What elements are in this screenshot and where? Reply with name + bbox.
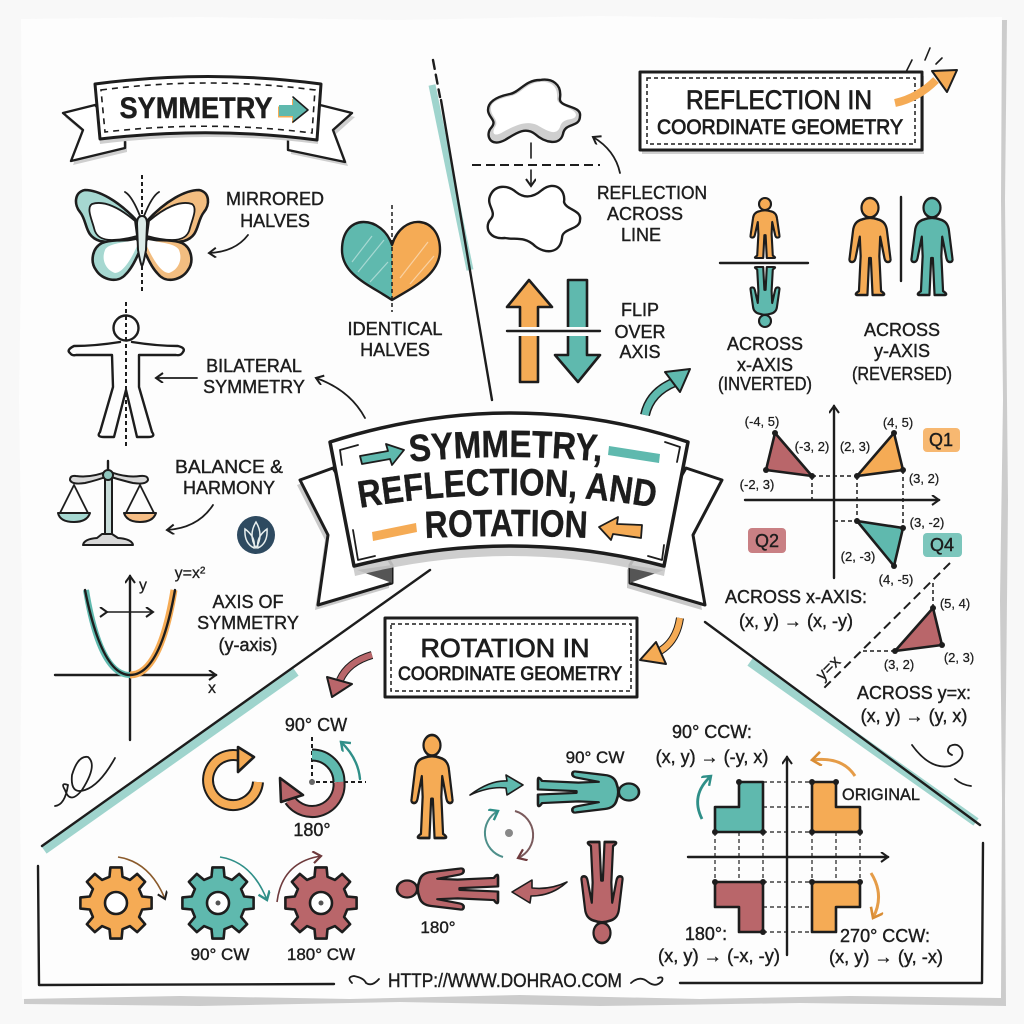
blobs: reflection across line: REFLECTION <box>597 183 707 203</box>
label: balance and harmony: HARMONY <box>183 478 275 498</box>
figure: across y-axis reflection: y-AXIS <box>874 341 930 361</box>
arrows: to rotation section <box>327 618 680 697</box>
rotating figure sequence <box>397 735 639 943</box>
rule: 180 <box>658 924 780 966</box>
arrows: flip over axis: AXIS <box>619 342 661 362</box>
rule: across x-axis: (x, y) → (x, -y) <box>739 611 853 631</box>
central title banner: REFLECTION, AND <box>358 468 656 508</box>
arrow: to 90 cw <box>470 775 523 795</box>
figure: across y-axis reflection: ACROSS <box>864 320 940 340</box>
chart: reflection coordinate plane: (2, 3) <box>840 439 870 454</box>
arrows: flip over axis: FLIP <box>621 300 659 320</box>
blobs: reflection across line: ACROSS <box>607 204 683 224</box>
rule: across x-axis: ACROSS x-AXIS: <box>725 587 867 607</box>
butterfly with mirrored halves <box>76 175 208 293</box>
rule: 180: (x, y) → (-x, -y) <box>658 946 780 966</box>
chart: reflection coordinate plane <box>740 406 962 587</box>
label: mirrored halves <box>209 189 324 253</box>
figure: across x-axis reflection <box>718 198 812 394</box>
icon: harmony badge <box>237 516 275 554</box>
title box: rotation in coordinate geometry <box>385 618 637 697</box>
figure: 180 maroon <box>397 868 498 937</box>
quadrant tag: Q1 <box>923 428 960 452</box>
quadrant tag: Q4: Q4 <box>930 535 954 555</box>
central title banner: ROTATION <box>426 510 586 538</box>
chart: reflection across y=x: (3, 2) <box>884 657 914 672</box>
chart: reflection coordinate plane: (-2, 3) <box>740 477 774 492</box>
banner arrow: teal <box>360 444 404 465</box>
gear: 180 CW <box>277 856 357 964</box>
arrows: flip over axis <box>507 280 666 382</box>
label: balance and harmony: BALANCE & <box>175 457 283 477</box>
central title banner <box>297 411 724 610</box>
arrow: to reflection section <box>645 369 690 415</box>
label: bilateral symmetry: SYMMETRY <box>203 377 305 397</box>
chart: reflection coordinate plane: (2, -3) <box>841 549 875 564</box>
arrows: flip over axis: OVER <box>614 322 666 342</box>
chart: parabola axis of symmetry <box>55 565 299 740</box>
gears <box>80 856 357 964</box>
quadrant tag: Q2 <box>748 528 786 553</box>
label: bilateral symmetry: BILATERAL <box>206 356 302 376</box>
chart: rotation coordinate grid: ORIGINAL <box>842 785 920 804</box>
rule: 180: 180°: <box>685 924 727 944</box>
chart: reflection coordinate plane: (4, -5) <box>879 572 913 587</box>
chart: reflection coordinate plane: (3, -2) <box>910 515 944 530</box>
chart: reflection across y=x: y=x <box>812 652 845 684</box>
figure: inverted maroon <box>581 842 623 943</box>
chart: reflection across y=x <box>812 563 974 690</box>
gear: 90 CW <box>182 857 267 964</box>
label: mirrored halves: MIRRORED <box>226 189 324 209</box>
gear: 90 CW: 90° CW <box>191 945 249 964</box>
title box: reflection in coordinate geometry <box>640 48 957 154</box>
title box: rotation in coordinate geometry: ROTATION IN <box>420 633 590 663</box>
rule: across y=x <box>857 683 971 726</box>
rule: 270 ccw: 270° CCW: <box>840 926 930 946</box>
chart: rotation coordinate grid <box>688 757 920 955</box>
doodle: spiral right <box>912 745 971 786</box>
label: bilateral symmetry <box>156 356 365 418</box>
gear: 180 CW: 180° CW <box>287 945 355 964</box>
gear: original <box>80 857 165 939</box>
figure: across y-axis reflection: (REVERSED) <box>852 364 952 384</box>
rule: 270 ccw <box>829 926 943 967</box>
figure: across x-axis reflection: (INVERTED) <box>718 374 812 394</box>
figure: 90 cw teal: 90° CW <box>566 748 624 767</box>
figure: 90 cw teal <box>538 748 639 813</box>
title box: reflection in coordinate geometry: REFLECTION IN <box>686 85 872 115</box>
blobs: reflection across line <box>472 80 707 251</box>
rule: across x-axis <box>725 587 867 631</box>
heart: identical halves <box>342 205 442 360</box>
banner: symmetry: SYMMETRY <box>120 92 272 125</box>
chart: reflection across y=x: (2, 3) <box>944 650 974 665</box>
central title banner: SYMMETRY, <box>410 430 600 468</box>
chart: reflection coordinate plane: (-4, 5) <box>745 414 779 429</box>
rule: across y=x: ACROSS y=x: <box>857 683 971 703</box>
heart: identical halves: IDENTICAL <box>348 319 442 339</box>
icon: rotation dial 90 and 180: 90° CW <box>285 715 347 735</box>
doodle: squiggle left <box>55 757 115 806</box>
icon: balance scale <box>58 461 156 545</box>
rule: 90 ccw: (x, y) → (-y, x) <box>656 747 768 767</box>
chart: parabola axis of symmetry: (y-axis) <box>218 635 278 655</box>
chart: reflection coordinate plane: (-3, 2) <box>795 439 829 454</box>
figure: bilateral symmetry <box>69 302 184 446</box>
figure: original orange <box>411 735 453 838</box>
figure: across x-axis reflection: x-AXIS <box>737 355 793 375</box>
rule: 270 ccw: (x, y) → (y, -x) <box>829 947 943 967</box>
rule: across y=x: (x, y) → (y, x) <box>861 706 967 726</box>
heart: identical halves: HALVES <box>360 340 430 360</box>
chart: parabola axis of symmetry: SYMMETRY <box>197 613 299 633</box>
chart: reflection coordinate plane: (3, 2) <box>909 471 939 486</box>
label: mirrored halves: HALVES <box>240 211 310 231</box>
quadrant tag: Q4 <box>923 533 962 557</box>
banner bar: teal <box>608 446 660 463</box>
chart: parabola axis of symmetry: y <box>139 577 147 594</box>
figure: 180 maroon: 180° <box>420 918 456 937</box>
banner: symmetry <box>63 76 355 166</box>
icon: rotation dial 90 and 180: 180° <box>293 820 331 840</box>
banner arrow: orange <box>599 517 642 540</box>
chart: parabola axis of symmetry: AXIS OF <box>212 592 284 612</box>
chart: parabola axis of symmetry: y=x² <box>175 565 206 582</box>
rule: 90 ccw <box>656 722 768 767</box>
icon: rotation centre <box>485 811 533 858</box>
icon: orange circular arrow <box>208 747 258 805</box>
icon: rotation dial 90 and 180 <box>280 715 366 840</box>
chart: reflection coordinate plane: (4, 5) <box>883 415 913 430</box>
blobs: reflection across line: LINE <box>621 225 661 245</box>
title box: rotation in coordinate geometry: COORDINATE GEOMETRY <box>398 664 622 685</box>
rule: 90 ccw: 90° CCW: <box>672 722 752 742</box>
banner bar: orange <box>372 523 417 541</box>
label: balance and harmony <box>167 457 283 530</box>
quadrant tag: Q2: Q2 <box>755 531 779 551</box>
footer url: HTTP://WWW.DOHRAO.COM <box>388 971 622 992</box>
figure: across x-axis reflection: ACROSS <box>727 334 803 354</box>
quadrant tag: Q1: Q1 <box>929 430 953 450</box>
title box: reflection in coordinate geometry: COORDINATE GEOMETRY <box>657 116 903 139</box>
chart: reflection across y=x: (5, 4) <box>940 596 970 611</box>
arrow: to 180 <box>512 880 567 903</box>
chart: parabola axis of symmetry: x <box>208 680 216 697</box>
figure: across y-axis reflection <box>849 197 953 384</box>
